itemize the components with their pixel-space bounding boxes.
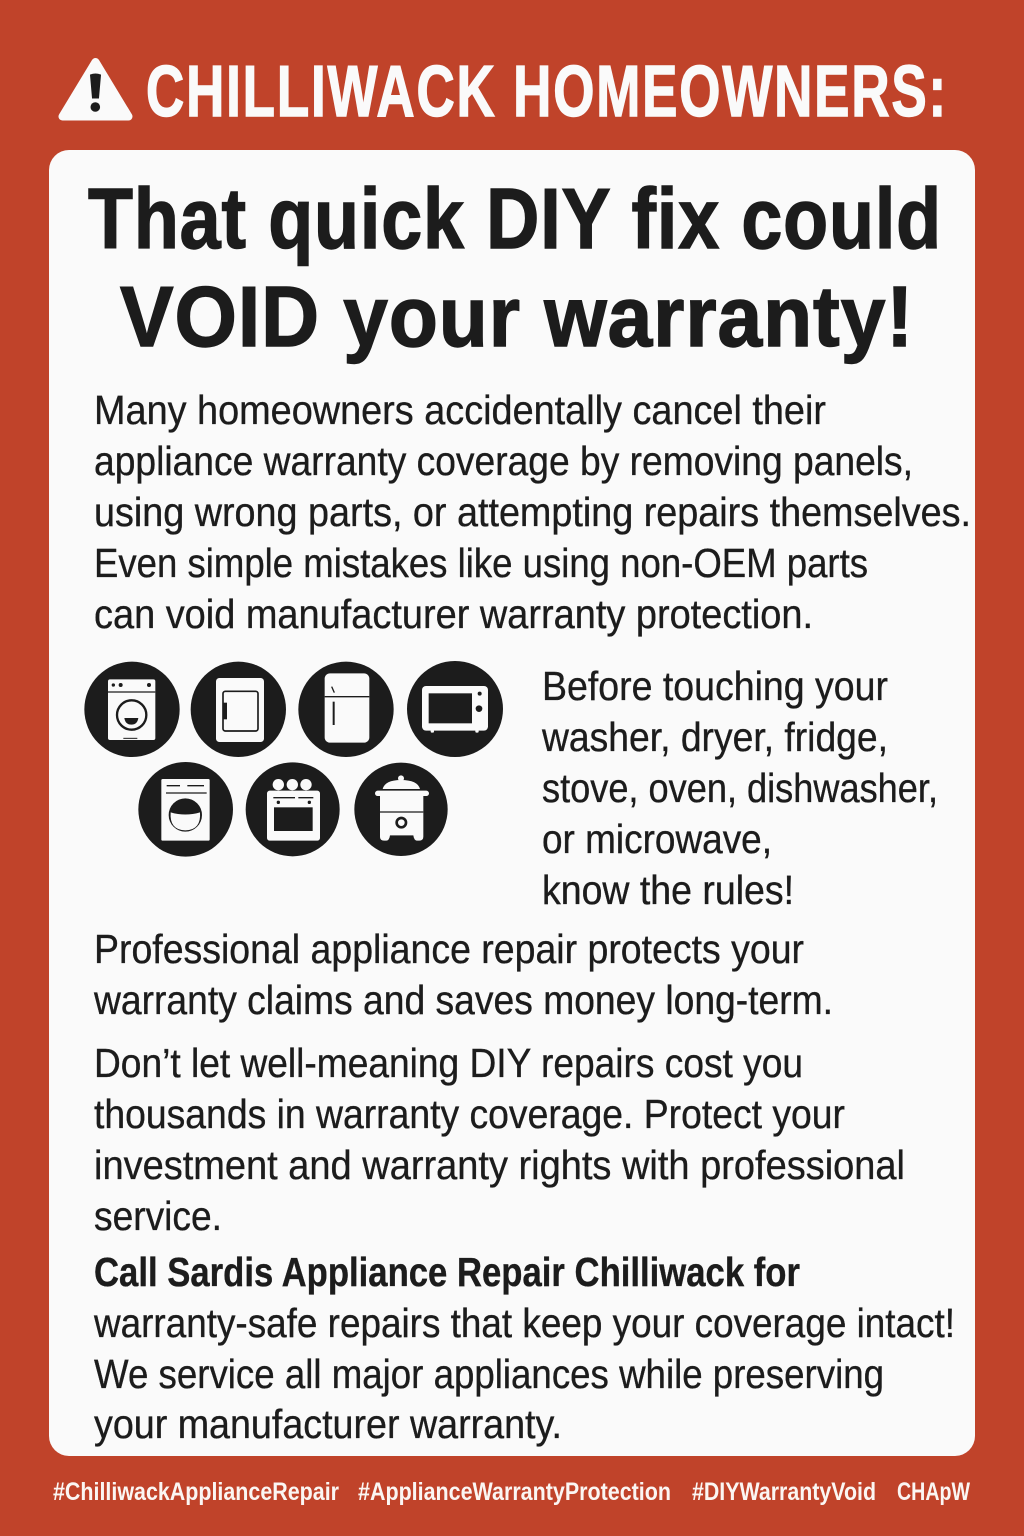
- footer hashtags: [53, 1478, 970, 1506]
- main headline: [88, 172, 942, 365]
- icon: microwave: [407, 661, 503, 757]
- text block: professional repair: [93, 926, 833, 1023]
- text block: before touching: Before touching your: [542, 663, 888, 709]
- text block: warning paragraph: investment and warranty rights with professional: [94, 1142, 905, 1188]
- header banner: [62, 52, 948, 132]
- icon: warning triangle: [62, 62, 128, 116]
- footer hashtags: #ApplianceWarrantyProtection: [358, 1478, 671, 1506]
- text block: warning paragraph: [94, 1040, 905, 1239]
- text block: call to action: warranty-safe repairs that keep your coverage intact!: [93, 1300, 955, 1346]
- footer hashtags: #DIYWarrantyVoid: [692, 1478, 876, 1506]
- icon: front-load washer: [138, 762, 233, 857]
- text block: before touching: stove, oven, dishwasher,: [542, 765, 938, 811]
- footer hashtags: CHApW: [897, 1478, 970, 1506]
- text block: professional repair: Professional appliance repair protects your: [94, 926, 804, 972]
- text block: before touching: [541, 663, 938, 913]
- panel: white content card: [49, 150, 975, 1456]
- text block: call to action: We service all major appliances while preserving: [94, 1351, 884, 1397]
- icon: fridge: [298, 662, 394, 757]
- text block: intro paragraph: can void manufacturer warranty protection.: [94, 591, 813, 637]
- text block: call to action: your manufacturer warranty.: [94, 1401, 562, 1447]
- footer hashtags: #ChilliwackApplianceRepair: [53, 1478, 339, 1506]
- text block: intro paragraph: Many homeowners accidentally cancel their: [94, 387, 826, 433]
- text block: warning paragraph: Don’t let well-meaning DIY repairs cost you: [94, 1040, 803, 1086]
- icon: washer: [84, 662, 180, 757]
- text block: intro paragraph: appliance warranty coverage by removing panels,: [94, 438, 913, 484]
- text block: intro paragraph: using wrong parts, or attempting repairs themselves.: [94, 489, 971, 535]
- text block: call to action: Call Sardis Appliance Repair Chilliwack for: [94, 1249, 800, 1295]
- icons: appliance group: [84, 661, 503, 857]
- text block: call to action: [93, 1249, 955, 1447]
- text block: before touching: know the rules!: [542, 867, 794, 913]
- main headline: VOID your warranty!: [120, 270, 914, 365]
- text block: professional repair: warranty claims and saves money long-term.: [93, 977, 833, 1023]
- text block: intro paragraph: Even simple mistakes like using non-OEM parts: [94, 540, 868, 586]
- text block: intro paragraph: [94, 387, 971, 637]
- text block: warning paragraph: service.: [94, 1193, 222, 1239]
- icon: dryer: [191, 662, 286, 757]
- text block: before touching: washer, dryer, fridge,: [541, 714, 888, 760]
- text block: warning paragraph: thousands in warranty coverage. Protect your: [94, 1091, 845, 1137]
- icon: stove: [246, 762, 340, 856]
- icon: slow cooker: [354, 763, 448, 856]
- text block: before touching: or microwave,: [542, 816, 772, 862]
